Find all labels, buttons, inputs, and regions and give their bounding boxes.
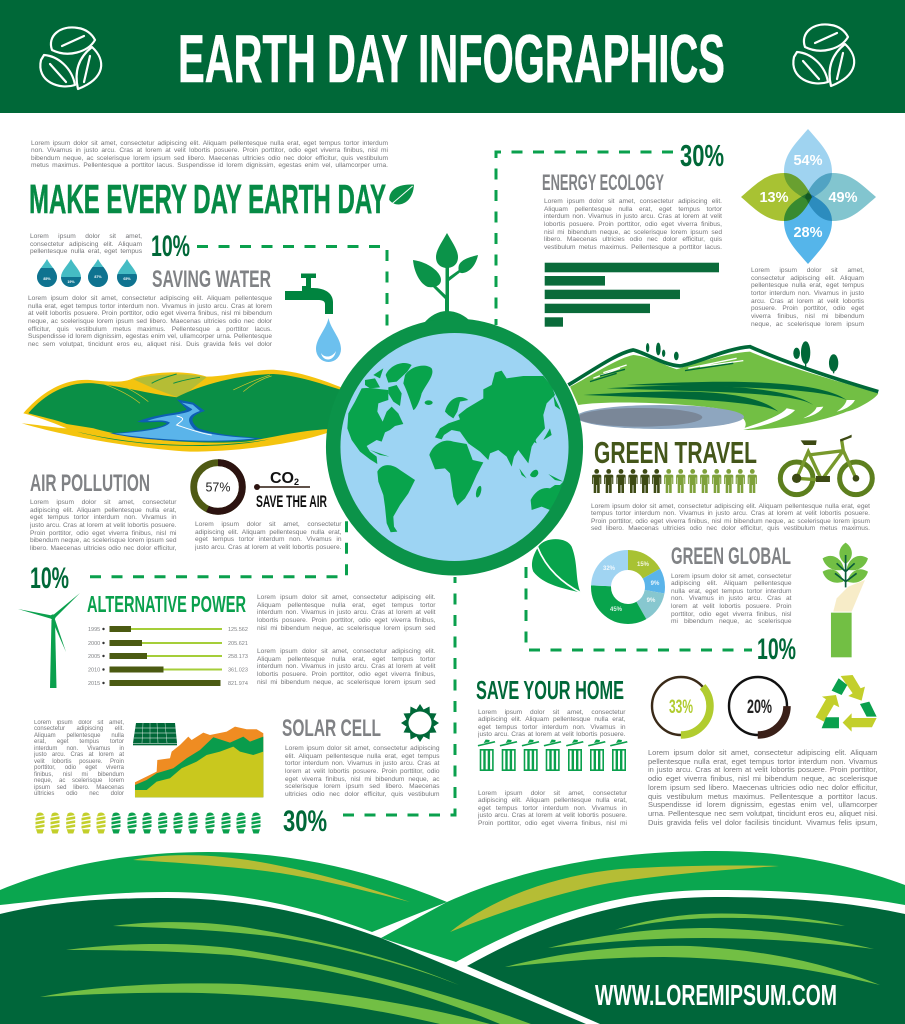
text block: water body: Suspendisse id lorem dignissim, egestas enim vel, ullamcorper urna. Pellentesque xyxy=(28,333,272,340)
chart: timeline bars: 2000 xyxy=(88,641,100,647)
donut chart: 9% xyxy=(651,581,660,587)
text block: home one xyxy=(478,708,626,740)
chart: four petal percentages xyxy=(741,129,876,264)
icon: three leaves right xyxy=(793,25,854,86)
dashed connector: global xyxy=(526,567,752,650)
text block: solar left: Aliquam pellentesque nulla xyxy=(34,732,124,738)
text block: solar left: porttitor, odio eget viverra xyxy=(34,765,124,771)
percent: 30: 30% xyxy=(283,805,327,838)
trees xyxy=(646,341,838,373)
text block: solar left: finibus, nisl mi bibendum xyxy=(34,772,124,778)
blades on front hills xyxy=(40,913,880,1024)
heading: green global: GREEN GLOBAL xyxy=(671,543,791,570)
ring chart: 20 percent: 20% xyxy=(747,697,772,718)
chart: timeline bars: 361.023 xyxy=(228,668,248,674)
text block: energy xyxy=(544,198,722,252)
heading: make every day earth day xyxy=(29,176,414,222)
ring chart: 33 percent: 33% xyxy=(669,697,693,718)
text block: petals: posuere. Proin porttitor, odio eget xyxy=(751,305,864,312)
text block: solar right xyxy=(285,745,440,799)
text block: air left: bibendum neque, ac scelerisque lorem ipsum sed xyxy=(30,537,176,544)
text block: power one: interdum non. Vivamus in justo arcu. Cras at lorem at velit xyxy=(257,609,436,616)
text block: water body: efficitur, quis vestibulum metus maximus. Pellentesque a porttitor lacus. xyxy=(28,326,272,333)
callout: co2 save the air: 2 xyxy=(294,477,299,487)
text block: petals xyxy=(751,267,864,329)
intro paragraph: non. Vivamus in justo arcu. Cras at lorem at velit lobortis posuere. Proin porttitor, odio eget viverra finibus, nisl mi xyxy=(31,147,388,154)
icon: water level drops: 85% xyxy=(43,277,51,281)
icon row: trash bins xyxy=(478,740,628,771)
chart: timeline bars: 821.974 xyxy=(228,681,248,687)
text block: air right: adipiscing elit. Aliquam pellentesque nulla erat, xyxy=(195,529,342,536)
text block: home three: Suspendisse id lorem dignissim, egestas enim vel, ullamcorper xyxy=(648,800,878,809)
dashed connector: solar xyxy=(343,577,455,815)
blade right olive xyxy=(450,865,779,932)
chart: timeline bars: 1995 xyxy=(88,627,100,633)
text block: travel xyxy=(591,502,870,534)
text block: air left: libero. Maecenas ultricies odio nec dolor efficitur, xyxy=(30,545,176,552)
icon: small leaf xyxy=(389,185,414,207)
donut chart: 9% xyxy=(647,598,656,604)
text block: solar right: eget viverra finibus, nisl mi bibendum neque, ac xyxy=(285,776,440,783)
text block: petals: arcu. Cras at lorem at velit lobortis xyxy=(751,298,864,305)
text block: power two: nisl mi bibendum neque, ac scelerisque lorem ipsum sed xyxy=(257,679,436,686)
text block: travel: tempus tortor interdum non. Vivamus in justo arcu. Cras at lorem at velit lobortis posuere. xyxy=(591,510,870,517)
panel: alternative power xyxy=(18,517,436,688)
text block: solar left: justo arcu. Cras at lorem at xyxy=(34,752,124,758)
front hill left xyxy=(0,898,586,1024)
text block: solar right: elit. Aliquam pellentesque nulla erat, eget tempus xyxy=(285,753,440,760)
illustration: green hills with lake xyxy=(568,341,878,430)
text block: solar left: Lorem ipsum dolor sit amet, xyxy=(34,720,124,726)
panel: green travel xyxy=(591,435,872,534)
globe ring xyxy=(333,326,576,568)
text block: travel: sed libero. Maecenas ultricies odio nec dolor efficitur, quis vestibulum metus maximus. xyxy=(591,525,870,532)
icon: solar panel xyxy=(133,723,177,745)
text block: solar right: scelerisque lorem ipsum sed libero. Maecenas xyxy=(285,783,440,790)
chart: timeline bars: 205.621 xyxy=(228,641,248,647)
chart: four petal percentages: 13% xyxy=(759,190,789,206)
dashed connector: water xyxy=(197,246,387,332)
text block: global xyxy=(671,572,792,626)
text block: air right: Lorem ipsum dolor sit amet, consectetur xyxy=(195,521,342,528)
continents xyxy=(347,363,563,532)
heading: alternative power: ALTERNATIVE POWER xyxy=(87,591,246,617)
text block: solar left: velit lobortis posuere. Proin xyxy=(34,758,124,764)
text block: solar right: ultricies odio nec dolor efficitur, quis vestibulum xyxy=(285,791,440,798)
chart: timeline bars xyxy=(88,626,248,687)
text block: air left: eget tempus tortor interdum non. Vivamus in xyxy=(30,514,176,521)
text block: petals: neque, ac scelerisque lorem ipsum xyxy=(751,321,864,328)
heading: saving water: SAVING WATER xyxy=(152,266,271,293)
text block: home three: quis vestibulum metus maximus. Pellentesque a porttitor lacus. xyxy=(648,792,878,801)
icon: sun xyxy=(401,704,439,742)
text block: petals: tortor interdum non. Vivamus in justo xyxy=(751,290,864,297)
text block: home two: Lorem ipsum dolor sit amet, consectetur xyxy=(478,790,627,796)
ring chart: 33 percent xyxy=(652,677,710,735)
text block: global: nulla erat, eget tempus tortor interdum xyxy=(671,588,792,595)
text block: air right xyxy=(195,521,342,552)
panel: saving water xyxy=(28,230,341,362)
icon: three leaves left xyxy=(40,28,101,89)
text block: power one: Aliquam pellentesque nulla erat, eget tempus tortor xyxy=(257,602,436,609)
text block: energy: nisl mi bibendum neque, ac scelerisque lorem ipsum sed xyxy=(544,229,722,236)
text block: solar right: lorem at velit lobortis posuere. Proin porttitor, odio xyxy=(285,768,440,775)
text block: energy: interdum non. Vivamus in justo arcu. Cras at lorem at velit xyxy=(544,213,722,220)
text block: energy: vestibulum metus maximus. Pellentesque a porttitor lacus. xyxy=(544,244,722,251)
text block: power two: lobortis posuere. Proin porttitor, odio eget viverra finibus, xyxy=(257,671,436,678)
text block: power two: Aliquam pellentesque nulla erat, eget tempus tortor xyxy=(257,656,436,663)
chart: timeline bars: 2015 xyxy=(88,681,100,687)
text block: power two: Lorem ipsum dolor sit amet, consectetur adipiscing elit. xyxy=(257,648,436,655)
text block: water body: at velit lobortis posuere. Proin porttitor, odio eget viverra finibus, nisl mi bibendum xyxy=(28,310,272,317)
intro paragraph: bibendum neque, ac scelerisque lorem ipsum sed libero. Maecenas ultricies odio nec dolor efficitur, quis vestibulum xyxy=(31,155,388,162)
ocean xyxy=(334,327,574,567)
globe xyxy=(333,233,576,568)
illustration: river valley landscape xyxy=(22,370,343,452)
heading: green travel: GREEN TRAVEL xyxy=(594,435,757,470)
text block: air left: Proin porttitor, odio eget viverra finibus, nisl mi xyxy=(30,530,176,537)
icon: faucet xyxy=(285,274,333,314)
text block: home three xyxy=(648,749,878,828)
area chart xyxy=(135,727,263,797)
icon: bicycle xyxy=(780,435,872,495)
icon: recycle xyxy=(816,675,877,732)
chart: four petal percentages: 54% xyxy=(793,153,823,169)
donut: 57 percent: 57% xyxy=(205,480,231,494)
text block: global: non. Vivamus in justo arcu. Cras at xyxy=(671,595,792,602)
text block: home one: adipiscing elit. Aliquam pellentesque nulla erat, xyxy=(478,716,626,723)
text block: home two: justo arcu. Cras at lorem at velit lobortis posuere. xyxy=(478,812,627,819)
heading: air pollution: AIR POLLUTION xyxy=(30,470,150,497)
donut chart xyxy=(601,560,660,614)
front hill right xyxy=(467,897,905,1024)
text block: air left: adipiscing elit. Aliquam pellentesque nulla erat, xyxy=(30,507,176,514)
text block: air left: Lorem ipsum dolor sit amet, consectetur xyxy=(30,499,176,506)
blade left olive xyxy=(133,855,410,902)
text block: air left: justo arcu. Cras at lorem at velit lobortis posuere. xyxy=(30,522,176,529)
text block: home two: adipiscing elit. Aliquam pellentesque nulla erat, xyxy=(478,797,627,804)
text block: water body: neque, ac scelerisque lorem ipsum sed libero. Maecenas ultricies odio nec dolor xyxy=(28,318,272,325)
text block: global: mi bibendum neque, ac scelerisque xyxy=(671,618,792,625)
text block: petals: pellentesque nulla erat, eget tempus xyxy=(751,282,864,289)
text block: global: adipiscing elit. Aliquam pellentesque xyxy=(671,580,792,587)
text block: power one: lobortis posuere. Proin porttitor, odio eget viverra finibus, xyxy=(257,617,436,624)
back hill left xyxy=(0,852,447,932)
text block: air left xyxy=(30,499,176,553)
text block: petals: Lorem ipsum dolor sit amet, xyxy=(751,267,864,274)
dashed connector: power xyxy=(90,517,346,577)
chart: four petal percentages: 28% xyxy=(793,225,823,241)
intro paragraph xyxy=(31,140,388,170)
icon: sprout xyxy=(413,233,478,323)
text block: travel: Proin porttitor, odio eget viverra finibus, nisl mi bibendum neque, ac scelerisque lorem ipsum xyxy=(591,518,870,525)
callout: co2 save the air xyxy=(254,470,327,511)
heading: save your home: SAVE YOUR HOME xyxy=(476,675,624,705)
heading: solar cell: SOLAR CELL xyxy=(282,715,381,742)
text block: water body: Lorem ipsum dolor sit amet, consectetur adipiscing elit. Aliquam pellentesque xyxy=(28,295,272,302)
percent: 10: 10% xyxy=(757,633,796,666)
chart: four petal percentages: 49% xyxy=(828,190,858,206)
donut: 57 percent xyxy=(194,463,242,511)
text block: water intro: consectetur adipiscing elit. Aliquam xyxy=(30,241,142,248)
header band xyxy=(0,0,905,113)
panel: save your home xyxy=(476,675,878,828)
text block: global: porttitor, odio eget viverra finibus, nisl xyxy=(671,611,792,618)
text block: power one: nisl mi bibendum neque, ac scelerisque lorem ipsum sed xyxy=(257,625,436,632)
text block: water body xyxy=(28,295,272,349)
text block: solar left: neque, ac scelerisque lorem xyxy=(34,778,124,784)
icon row: people xyxy=(592,469,757,493)
donut chart: 15% xyxy=(637,562,650,568)
text block: water body: nec sem volutpat, tincidunt eros eu, aliquet nisi. Duis gravida felis vel dolor xyxy=(28,341,272,348)
text block: energy: lobortis posuere. Proin porttitor, odio eget viverra finibus, xyxy=(544,221,722,228)
bar chart xyxy=(545,263,719,327)
panel: green global xyxy=(526,539,868,666)
text block: power one: Lorem ipsum dolor sit amet, consectetur adipiscing elit. xyxy=(257,594,436,601)
text block: home two: eget tempus tortor interdum non. Vivamus in xyxy=(478,805,627,812)
text block: solar left: consectetur adipiscing elit. xyxy=(34,726,124,732)
icon: hand holding plant xyxy=(823,543,868,657)
callout: co2 save the air: CO xyxy=(270,470,294,487)
chart: timeline bars: 258.173 xyxy=(228,654,248,660)
dashed connector: energy xyxy=(496,152,673,325)
text block: petals: viverra finibus, nisl mi bibendum xyxy=(751,313,864,320)
text block: global: lorem at velit lobortis posuere. Proin xyxy=(671,603,792,610)
panel: solar cell xyxy=(34,577,455,838)
percent: 30: 30% xyxy=(680,138,724,173)
text block: water intro: Lorem ipsum dolor sit amet, xyxy=(30,233,142,240)
text block: water body: nulla erat, eget tempus tortor interdum non. Vivamus in justo arcu. Cras at lorem xyxy=(28,303,272,310)
text block: power two xyxy=(257,648,436,687)
icon: water level drops: 65% xyxy=(123,277,131,281)
icon: water level drops xyxy=(37,259,137,287)
ring chart: 20 percent xyxy=(729,677,787,735)
percent: 10: 10% xyxy=(151,230,190,263)
text block: travel: Lorem ipsum dolor sit amet, consectetur adipiscing elit. Aliquam pellentesque nulla erat, eget xyxy=(591,502,870,510)
icon: water level drops: 19% xyxy=(67,280,75,284)
footer hills xyxy=(0,851,905,1024)
text block: home three: in justo arcu. Cras at lorem at velit lobortis posuere. Proin porttitor, xyxy=(648,765,878,774)
text block: home three: lorem ipsum sed libero. Maecenas ultricies odio nec dolor efficitur, xyxy=(648,783,878,792)
text block: power two: interdum non. Vivamus in justo arcu. Cras at lorem at velit xyxy=(257,663,436,670)
text block: home two: Proin porttitor, odio eget viverra finibus, nisl mi xyxy=(478,820,627,827)
text block: air right: justo arcu. Cras at lorem at velit lobortis posuere. xyxy=(195,544,342,551)
chart: timeline bars: 2005 xyxy=(88,654,100,660)
chart: timeline bars: 2010 xyxy=(88,668,100,674)
donut chart: 45% xyxy=(610,607,623,613)
text block: global: Lorem ipsum dolor sit amet, consectetur xyxy=(671,572,792,580)
text block: solar left: erat, eget tempus tortor xyxy=(34,739,124,745)
percent: 10: 10% xyxy=(30,562,69,595)
text block: energy: libero. Maecenas ultricies odio nec dolor efficitur, quis xyxy=(544,236,722,243)
icon: big leaf xyxy=(532,539,581,593)
text block: home two xyxy=(478,790,627,828)
icon: water drop xyxy=(316,318,341,362)
text block: energy: Aliquam pellentesque nulla erat, eget tempus tortor xyxy=(544,206,722,213)
icon: water level drops: 87% xyxy=(94,275,102,279)
text block: home three: pellentesque nulla erat, eget tempus tortor interdum non. Vivamus xyxy=(648,757,878,766)
text block: solar left: interdum non. Vivamus in xyxy=(34,746,124,752)
intro paragraph: Lorem ipsum dolor sit amet, consectetur adipiscing elit. Aliquam pellentesque nulla erat, eget tempus tortor interdum xyxy=(31,140,388,146)
text block: home one: justo arcu. Cras at lorem at velit lobortis posuere. xyxy=(478,731,626,738)
heading: energy ecology: ENERGY ECOLOGY xyxy=(542,170,664,195)
text block: home one: eget tempus tortor interdum non. Vivamus in xyxy=(478,724,626,731)
text block: water intro xyxy=(30,233,142,257)
panel: air pollution xyxy=(30,463,342,553)
chart: timeline bars: 125.562 xyxy=(228,627,248,633)
callout: co2 save the air: SAVE THE AIR xyxy=(256,493,327,511)
text block: air right: eget tempus tortor interdum non. Vivamus in xyxy=(195,536,342,543)
text block: petals: consectetur adipiscing elit. Aliquam xyxy=(751,275,864,282)
text block: home three: Duis gravida felis vel dolor facilisis tincidunt. Vivamus felis ipsum, xyxy=(648,818,878,827)
heading: make every day earth day: MAKE EVERY DAY EARTH DAY xyxy=(29,176,386,222)
text block: home three: odio eget viverra finibus, nisl mi bibendum neque, ac scelerisque xyxy=(648,774,878,783)
donut chart: 32% xyxy=(603,566,616,572)
text block: home one: Lorem ipsum dolor sit amet, consectetur xyxy=(478,708,626,716)
text block: water intro: pellentesque nulla erat, eget tempus xyxy=(30,248,142,255)
intro paragraph: metus maximus. Pellentesque a porttitor lacus. Suspendisse id lorem dignissim, egestas enim vel, ullamcorper urna. xyxy=(31,162,388,169)
text block: solar left xyxy=(34,720,124,798)
text block: solar right: tortor interdum non. Vivamus in justo arcu. Cras at xyxy=(285,760,440,767)
text block: solar right: Lorem ipsum dolor sit amet, consectetur adipiscing xyxy=(285,745,440,752)
panel: energy ecology xyxy=(496,138,724,327)
icon: wind turbine xyxy=(18,593,80,688)
text block: energy: Lorem ipsum dolor sit amet, consectetur adipiscing elit. xyxy=(544,198,722,205)
icon row: energy bulbs xyxy=(36,812,260,834)
text block: solar left: ipsum sed libero. Maecenas xyxy=(34,784,124,790)
text block: home three: urna. Pellentesque nec sem volutpat, tincidunt eros eu, aliquet nisi. xyxy=(648,809,878,818)
text block: solar left: ultricies odio nec dolor xyxy=(34,791,124,797)
text block: power one xyxy=(257,594,436,633)
back hill right xyxy=(381,851,905,962)
